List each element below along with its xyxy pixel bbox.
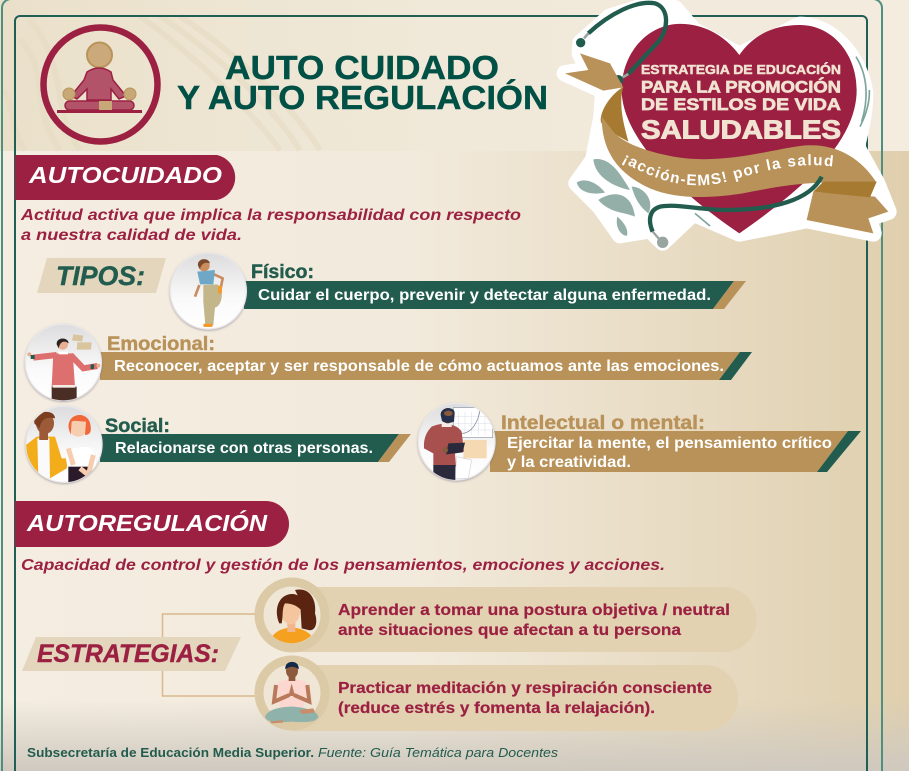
heart (622, 24, 857, 233)
illustration: meditating person (265, 662, 318, 723)
heading: autorregulación: AUTOREGULACIÓN (26, 509, 267, 536)
label: estrategias (22, 637, 241, 671)
type: social: Relacionarse con otras personas. (115, 440, 373, 457)
title (177, 49, 548, 116)
type: intelectual o mental: Ejercitar la mente, el pensamiento crítico (507, 435, 832, 452)
type: social (26, 406, 411, 483)
strategy 2: (reduce estrés y fomenta la relajación). (338, 700, 655, 717)
label: estrategias: ESTRATEGIAS: (37, 640, 219, 668)
illustration: woman portrait (270, 589, 316, 645)
strategy 2 (254, 656, 738, 731)
logo: heart badge (556, 0, 897, 251)
type: emocional: Reconocer, aceptar y ser responsable de cómo actuamos ante las emociones. (114, 358, 724, 375)
stethoscope lower (650, 177, 822, 248)
icon: meditating person (44, 28, 158, 142)
strategy 2: Practicar meditación y respiración consciente (338, 680, 712, 697)
ribbon (565, 53, 888, 233)
illustration: man with tablet (418, 403, 495, 482)
stethoscope upper (576, 3, 666, 85)
badge text: ESTRATEGIA DE EDUCACIÓN (641, 62, 841, 77)
type: físico: Físico: (251, 262, 314, 283)
type: emocional (25, 324, 752, 403)
heading: autorregulación (15, 501, 289, 547)
footer source line: Subsecretaría de Educación Media Superior. (27, 745, 314, 760)
type: intelectual o mental: Intelectual o mental: (501, 413, 705, 434)
heading: autocuidado (15, 155, 235, 200)
type: intelectual o mental: y la creatividad. (507, 454, 631, 471)
strategy 1: Aprender a tomar una postura objetiva / neutral (338, 602, 730, 619)
footer source line (27, 745, 559, 760)
badge text: DE ESTILOS DE VIDA (641, 95, 841, 114)
logo: heart badge: ¡acción-EMS! por la salud (622, 154, 833, 186)
badge text: SALUDABLES (641, 114, 841, 144)
badge text: PARA LA PROMOCIÓN (641, 77, 841, 96)
illustration: stretching woman (170, 253, 246, 329)
definition: autocuidado (20, 207, 521, 244)
title: Y AUTO REGULACIÓN (177, 79, 548, 116)
leaves (577, 159, 650, 236)
connector lines (162, 614, 256, 696)
illustration: two people talking (26, 406, 102, 483)
footer source line: Fuente: Guía Temática para Docentes (318, 745, 559, 760)
type: emocional: Emocional: (107, 334, 215, 355)
definition: autocuidado: Actitud activa que implica la responsabilidad con respecto (20, 207, 521, 224)
type: social: Social: (105, 416, 170, 437)
side strokes (695, 57, 869, 226)
type: físico: Cuidar el cuerpo, prevenir y detectar alguna enfermedad. (258, 287, 711, 304)
illustration: man with speech bubbles (25, 324, 101, 403)
heading: autocuidado: AUTOCUIDADO (28, 162, 222, 188)
definition: autocuidado: a nuestra calidad de vida. (21, 227, 242, 244)
label: tipos (37, 258, 166, 293)
title: AUTO CUIDADO (225, 49, 499, 86)
badge text (641, 62, 841, 144)
type: físico (170, 253, 746, 329)
white sticker backing (565, 3, 888, 242)
ribbon text (622, 162, 870, 185)
strategy 1 (254, 578, 756, 652)
strategy 1: ante situaciones que afectan a tu persona (338, 622, 681, 639)
type: intelectual o mental (418, 403, 861, 482)
definition: autorregulación: Capacidad de control y gestión de los pensamientos, emociones y acciones. (21, 557, 665, 574)
label: tipos: TIPOS: (56, 261, 145, 291)
